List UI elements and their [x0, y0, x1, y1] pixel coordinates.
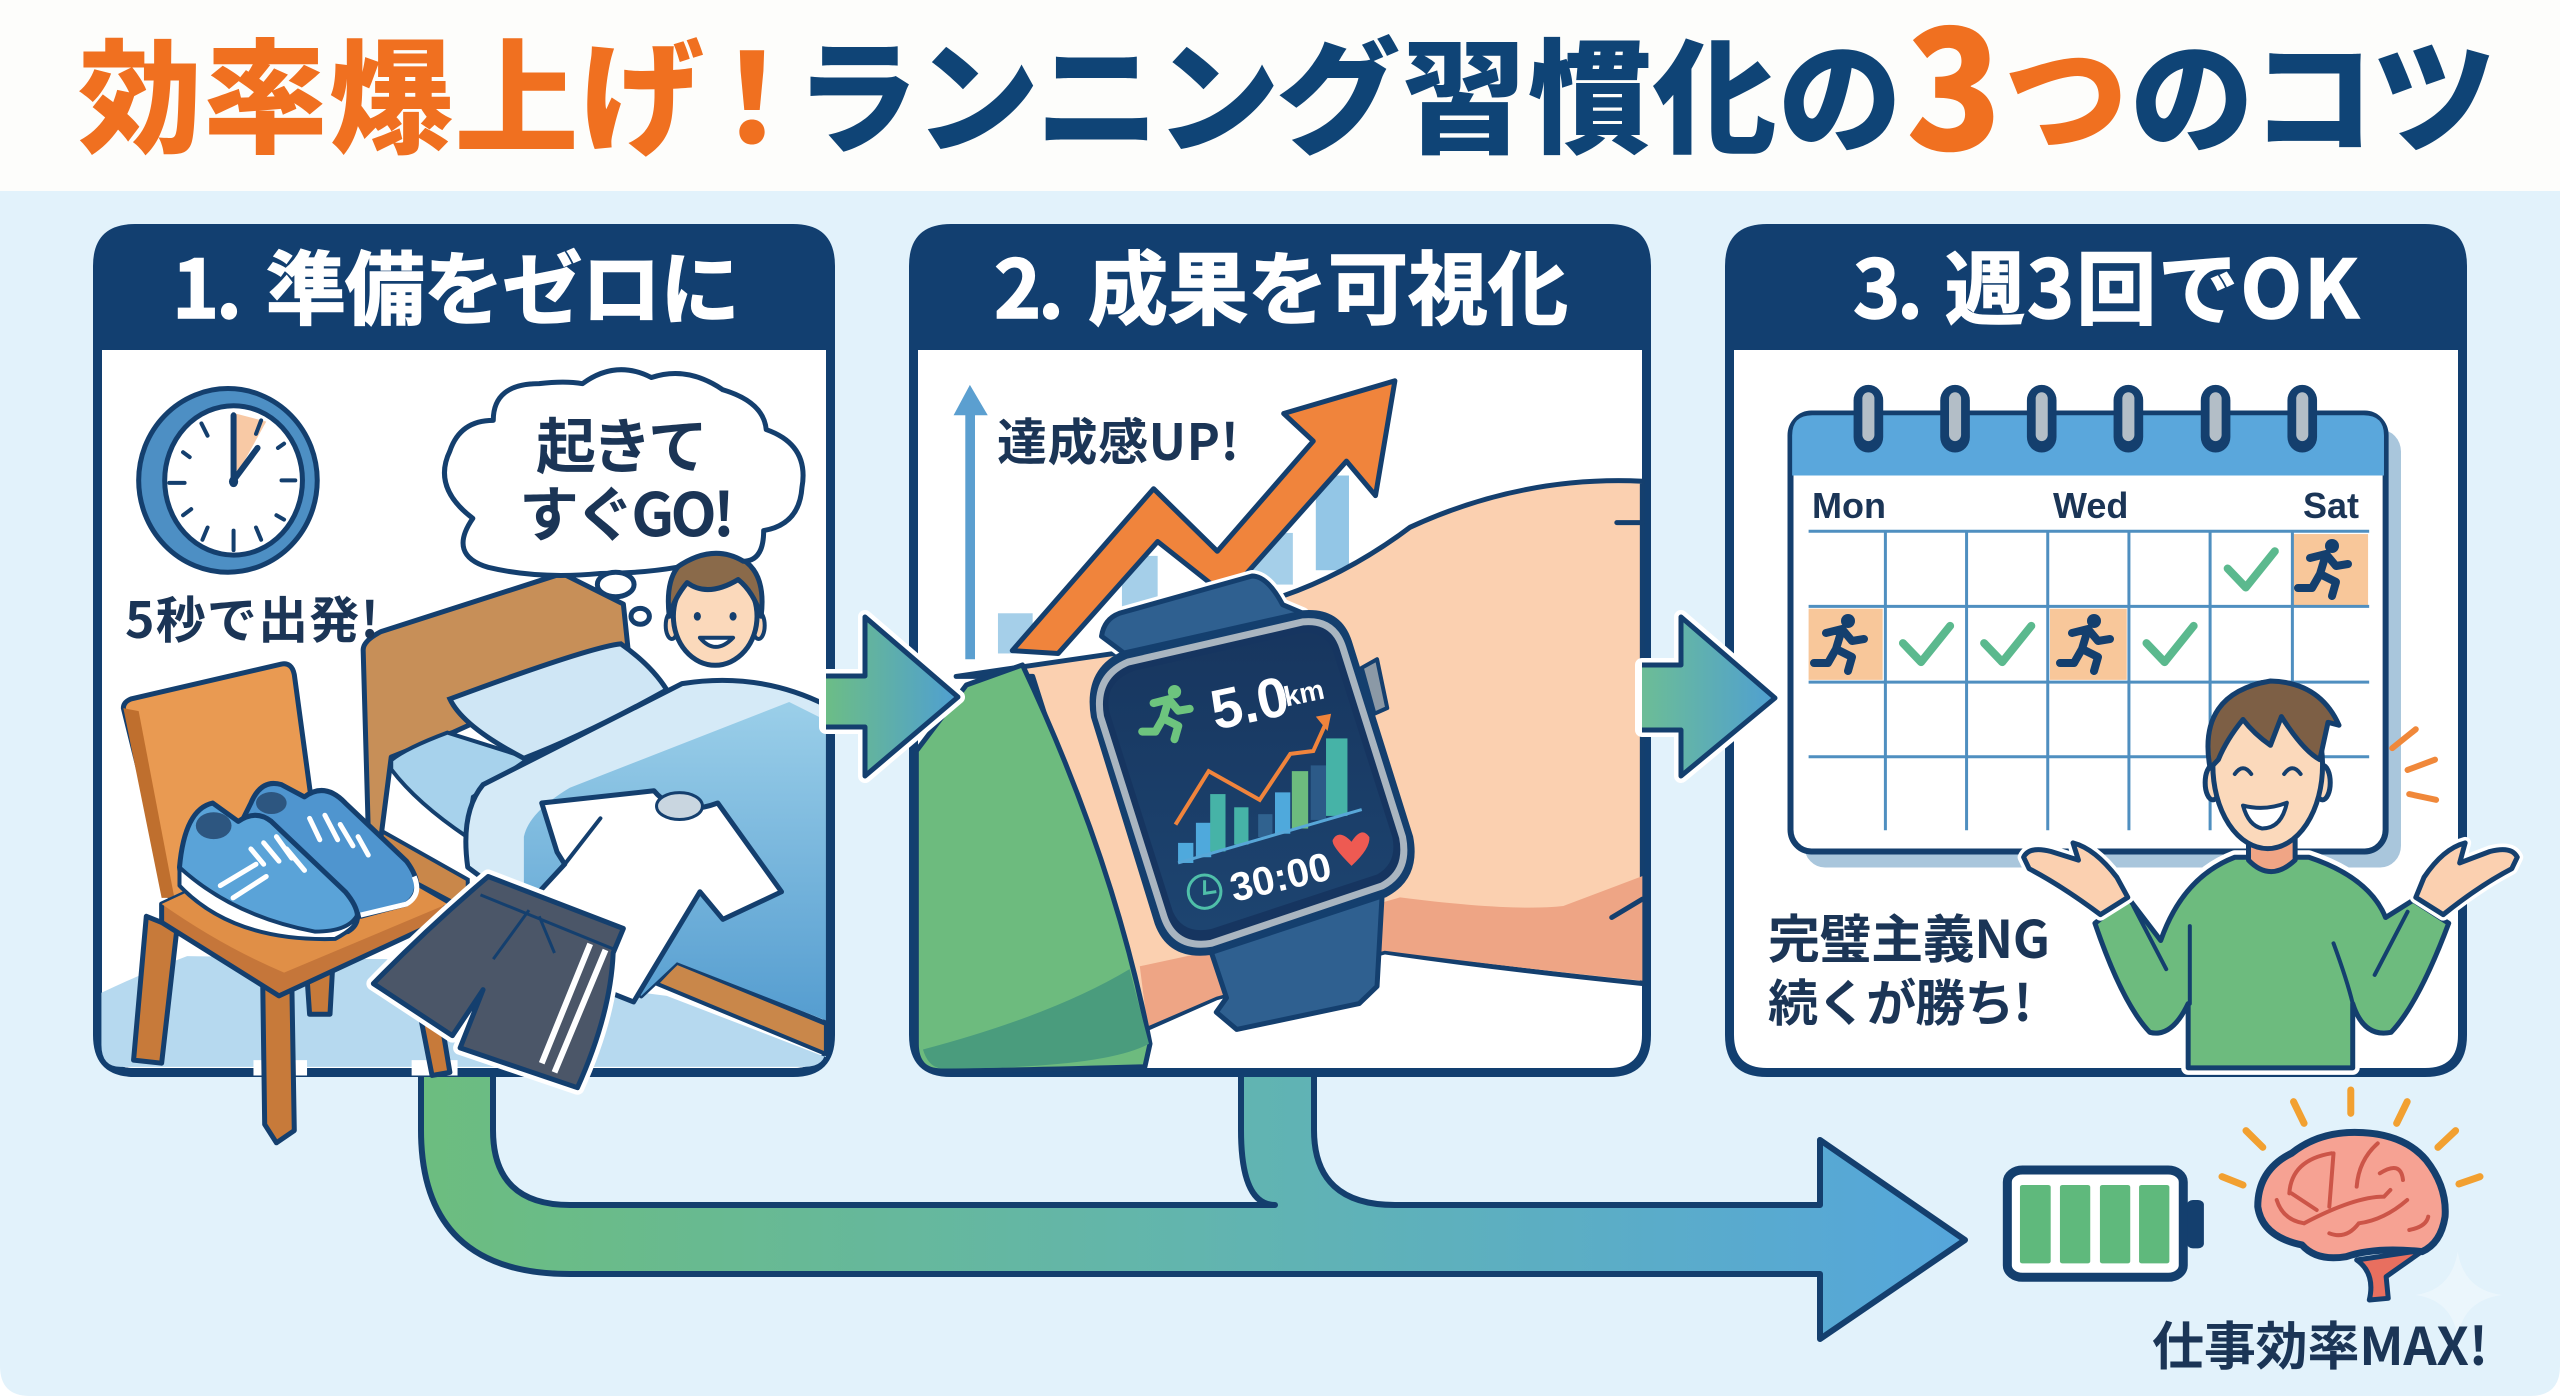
outcome: battery and brain [2007, 1090, 2502, 1380]
calendar grid [1809, 531, 2369, 830]
panel 3 frame [1725, 224, 2467, 1077]
header band [0, 0, 2560, 191]
dark shorts [373, 876, 623, 1088]
panel 1: 準備をゼロに [93, 224, 835, 1143]
thought bubble [444, 370, 803, 624]
watch chart [1176, 714, 1362, 863]
title: ランニング [795, 0, 1400, 179]
label: 完璧主義NG 続くが勝ち: 完璧主義NG [1768, 898, 2050, 973]
title: 効率爆上げ [78, 0, 704, 179]
label: 完璧主義NG 続くが勝ち [1768, 898, 2050, 1036]
watch distance [1205, 656, 1330, 742]
smiling person [2024, 681, 2517, 1068]
bubble text [519, 399, 735, 554]
title: ！ [690, 0, 814, 179]
icon: glowing brain [2258, 1132, 2502, 1337]
bed [363, 573, 826, 1054]
runner on watch [1142, 685, 1190, 739]
title [78, 0, 2496, 198]
panel 2 heading: 成果を可視化 [1088, 226, 1568, 342]
title: のコツ [2130, 0, 2496, 179]
panel 3: 週3回でOK [1725, 224, 2517, 1077]
highlighted run days [1809, 534, 2368, 680]
label: 5秒で出発: 5秒で出発! [125, 581, 379, 653]
label: 達成感UP: 達成感UP! [997, 403, 1239, 475]
sparkle lines [2392, 729, 2436, 800]
panel 2 frame [909, 224, 1651, 1077]
label: 仕事効率MAX: 仕事効率MAX! [2152, 1305, 2488, 1380]
bubble text: 起きて [536, 399, 708, 486]
panel 2: 成果を可視化 [909, 224, 1651, 1077]
title: つ [2004, 0, 2128, 179]
chair [123, 664, 450, 1143]
border gaps [253, 1060, 590, 1075]
rising orange arrow [1012, 381, 1395, 653]
panel 1 heading: 1. [172, 226, 242, 342]
panel 3 heading: 週3回でOK [1945, 226, 2360, 342]
head of person [666, 552, 765, 665]
label: 完璧主義NG 続くが勝ち: 続くが勝ち! [1768, 964, 2032, 1036]
running shoes [179, 783, 417, 939]
panel 3 heading: 3. [1853, 226, 1923, 342]
chart axis and bars [954, 385, 1349, 659]
check marks [1903, 551, 2275, 662]
smartwatch [1093, 576, 1412, 1029]
arm [956, 481, 1642, 1029]
weekday labels [1812, 485, 2359, 526]
panel 3 interior [1734, 350, 2458, 1068]
white t-shirt [539, 791, 782, 1002]
weekday labels: Wed [2053, 485, 2128, 526]
watch time: 30:00 [1226, 845, 1336, 911]
icon: full battery [2007, 1170, 2204, 1277]
runner icon: Sat [2298, 539, 2348, 596]
panel 1 frame [93, 224, 835, 1077]
arrow: panels 1 and 2 flow to battery and brain [421, 1070, 1965, 1339]
panel 1 heading: 準備をゼロに [266, 226, 740, 342]
sparkle rays [2222, 1090, 2480, 1185]
panel 2 interior [918, 350, 1642, 1068]
clock [139, 389, 317, 572]
watch distance: km [1281, 674, 1327, 712]
runner icon: Wed [2060, 614, 2110, 671]
arrow: panel 2 to panel 3 [1642, 617, 1775, 776]
green sleeve [916, 665, 1150, 1071]
weekday labels: Sat [2303, 485, 2359, 526]
calendar [1791, 385, 2401, 868]
heart [1333, 832, 1369, 866]
weekday labels: Mon [1812, 485, 1886, 526]
watch distance: 5.0 [1205, 664, 1294, 742]
runner icon: Mon [1814, 614, 1864, 671]
panel 2 heading: 2. [994, 226, 1064, 342]
floor [101, 956, 826, 1067]
clock icon [1188, 875, 1221, 908]
calendar rings [1854, 385, 2317, 453]
bubble text: すぐGO! [519, 467, 735, 554]
title: 習慣化の [1402, 0, 1902, 179]
arrow: panel 1 to panel 2 [826, 617, 958, 776]
panel 1 interior [102, 350, 826, 1068]
